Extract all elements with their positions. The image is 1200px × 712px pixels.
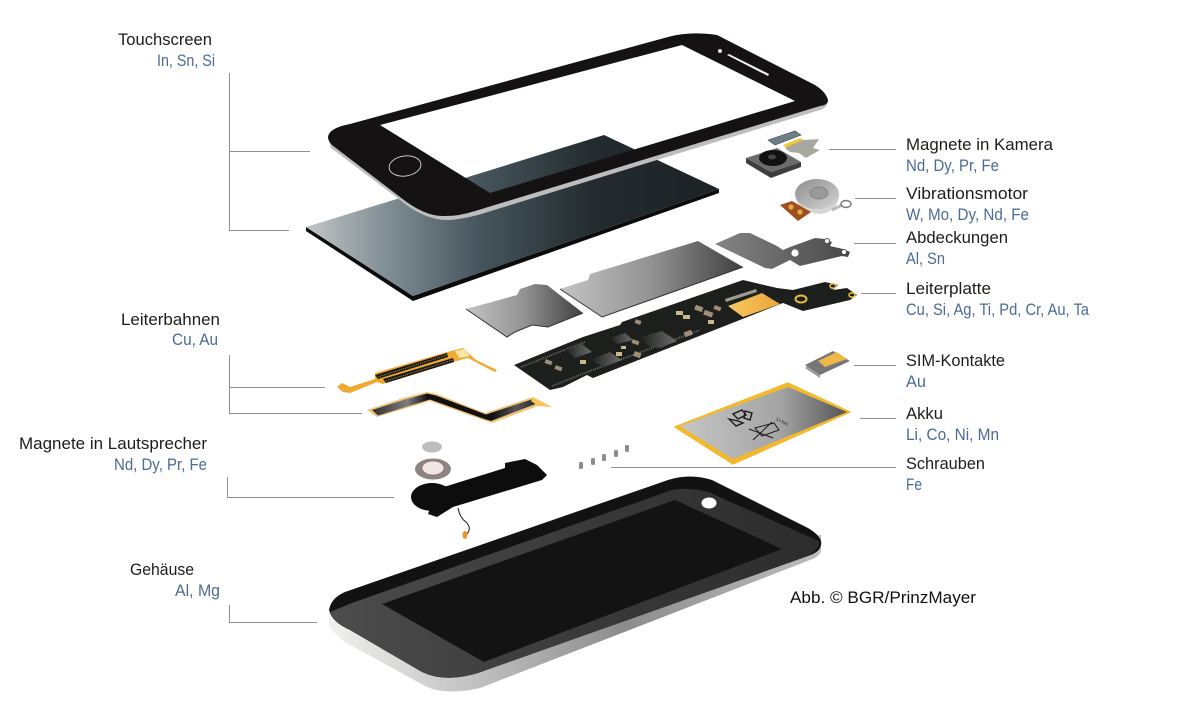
label: Leiterplatte	[906, 280, 1090, 319]
label: Akku	[906, 405, 999, 444]
label: Leiterplatte: Leiterplatte	[906, 280, 991, 298]
label: Abdeckungen	[906, 229, 1008, 268]
label: Magnete in Lautsprecher: Nd, Dy, Pr, Fe	[114, 456, 207, 474]
icon: recycle symbol	[729, 410, 752, 426]
battery marking: Li-Ion	[775, 416, 789, 428]
label: Abdeckungen: Abdeckungen	[906, 229, 1008, 247]
panel: battery	[675, 383, 850, 464]
panel: flex circuit top	[337, 348, 497, 393]
label: Akku: Li, Co, Ni, Mn	[906, 426, 999, 444]
icon: camera dot	[718, 49, 722, 53]
label: Gehäuse: Al, Mg	[175, 582, 220, 600]
label: Touchscreen: In, Sn, Si	[157, 52, 215, 70]
label: Touchscreen: Touchscreen	[118, 31, 212, 49]
icon: home button	[388, 154, 422, 178]
label: Leiterbahnen	[121, 311, 220, 349]
panel: SIM contacts	[805, 351, 850, 378]
label: Leiterbahnen: Leiterbahnen	[121, 311, 220, 329]
panel: rear housing	[329, 476, 821, 692]
label: Magnete in Lautsprecher	[19, 435, 208, 474]
label: Akku: Akku	[906, 405, 943, 423]
label: Schrauben: Fe	[906, 476, 922, 494]
label: Leiterbahnen: Cu, Au	[172, 331, 218, 349]
panel: camera module	[746, 131, 820, 178]
label: Schrauben	[906, 455, 985, 494]
credit: Abb. © BGR/PrinzMayer	[790, 588, 976, 607]
label: Magnete in Kamera: Nd, Dy, Pr, Fe	[906, 157, 999, 175]
label: Gehäuse: Gehäuse	[130, 561, 194, 579]
label: SIM-Kontakte: Au	[906, 373, 926, 391]
icon: crossed-out bin	[749, 422, 779, 440]
icon: screws	[579, 445, 629, 469]
icon: speaker slit	[727, 54, 769, 76]
label: Vibrationsmotor: Vibrationsmotor	[906, 185, 1029, 203]
leader lines	[228, 73, 896, 622]
label: SIM-Kontakte: SIM-Kontakte	[906, 352, 1005, 370]
panel: speaker parts	[411, 442, 547, 539]
icon: solder rings	[796, 296, 806, 302]
panel: cover plates	[466, 233, 850, 337]
panel: screen sheet	[306, 135, 719, 301]
label: Gehäuse	[130, 561, 220, 600]
label: Schrauben: Schrauben	[906, 455, 985, 473]
panel: touchscreen front glass	[328, 33, 828, 220]
label: Vibrationsmotor	[906, 185, 1029, 224]
label: Magnete in Lautsprecher: Magnete in Lautsprecher	[19, 435, 208, 453]
label: Abdeckungen: Al, Sn	[906, 250, 945, 268]
panel: circuit board	[514, 280, 857, 390]
icon: gold pad	[728, 293, 780, 317]
label: Magnete in Kamera	[906, 136, 1054, 175]
label: Magnete in Kamera: Magnete in Kamera	[906, 136, 1054, 154]
label: Vibrationsmotor: W, Mo, Dy, Nd, Fe	[906, 206, 1029, 224]
panel: vibration motor	[780, 179, 851, 221]
label: Touchscreen	[118, 31, 215, 70]
label: SIM-Kontakte	[906, 352, 1005, 391]
label: Leiterplatte: Cu, Si, Ag, Ti, Pd, Cr, Au, Ta	[906, 301, 1090, 319]
icon: camera hole	[702, 498, 716, 508]
panel: flex circuit bottom	[367, 392, 552, 423]
